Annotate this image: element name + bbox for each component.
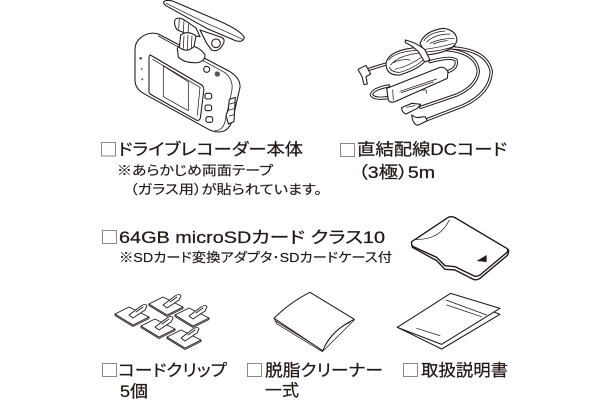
title: DC cord label: 直結配線DCコード (357, 140, 507, 159)
clip 5 (167, 328, 201, 350)
title: cleaner label (248, 361, 383, 400)
icon: dash camera with mount (135, 0, 244, 132)
icon: direct wiring DC cord (358, 28, 491, 125)
text: microSD card note: ※SDカード変換アダプタ･SDカードケース付 (119, 250, 392, 265)
icon: instruction manual (397, 293, 500, 349)
title: manual label: 取扱説明書 (421, 361, 508, 380)
icon: degreasing cleaner cloth (274, 292, 354, 352)
title: cord clip label (102, 361, 228, 401)
title: dash camera label: ドライブレコーダー本体 (118, 139, 304, 159)
clip 2 (175, 306, 209, 328)
icon: cord clips (115, 294, 209, 350)
clip 3 (115, 304, 149, 326)
title: cleaner label: 一式 (265, 381, 299, 400)
title: cord clip label: コードクリップ (118, 361, 228, 380)
title: DC cord label (340, 140, 507, 182)
clip 1 (149, 294, 183, 316)
text: dash camera note (117, 163, 322, 197)
title: microSD card label: 64GB microSDカード クラス10 (119, 228, 385, 247)
icon: microSD card (412, 217, 509, 280)
clip 4 (141, 316, 175, 338)
text: dash camera note: ※あらかじめ両面テープ (117, 163, 273, 178)
title: cord clip label: 5個 (120, 382, 148, 401)
text: dash camera note: （ガラス用）が貼られています。 (130, 182, 322, 197)
title: cleaner label: 脱脂クリーナー (265, 361, 383, 380)
title: DC cord label: （3極）5m (358, 163, 435, 182)
